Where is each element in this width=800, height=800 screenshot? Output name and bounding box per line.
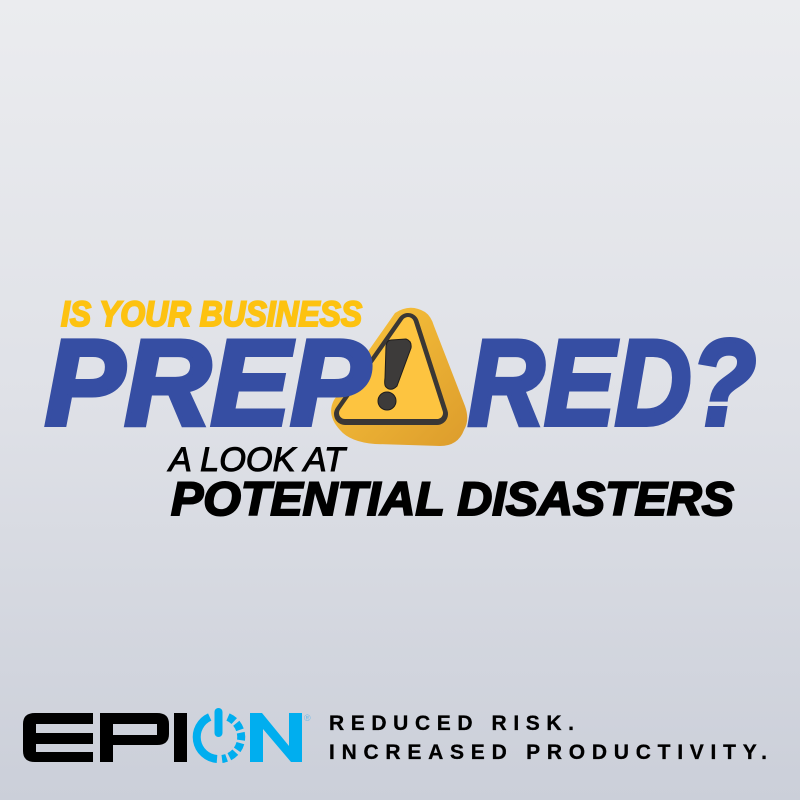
icon: warning triangle [331,308,467,446]
logo letter: N [250,713,302,762]
logo letters: E P I [23,713,93,762]
exclamation mark [378,339,411,410]
tagline [329,712,767,764]
tagline line 2: INCREASED PRODUCTIVITY. [329,741,767,764]
heading: is your business: IS YOUR BUSINESS [61,295,362,334]
tagline line 1: REDUCED RISK. [329,712,574,735]
logo: EPION [23,708,311,762]
subheading: potential disasters: POTENTIAL DISASTERS [171,472,734,525]
subheading: a look at: A LOOK AT [167,441,347,479]
heading: PREP: PREP [45,314,371,450]
registered mark: ® [304,713,311,723]
power icon [197,708,241,759]
heading: RED?: RED? [468,314,756,450]
